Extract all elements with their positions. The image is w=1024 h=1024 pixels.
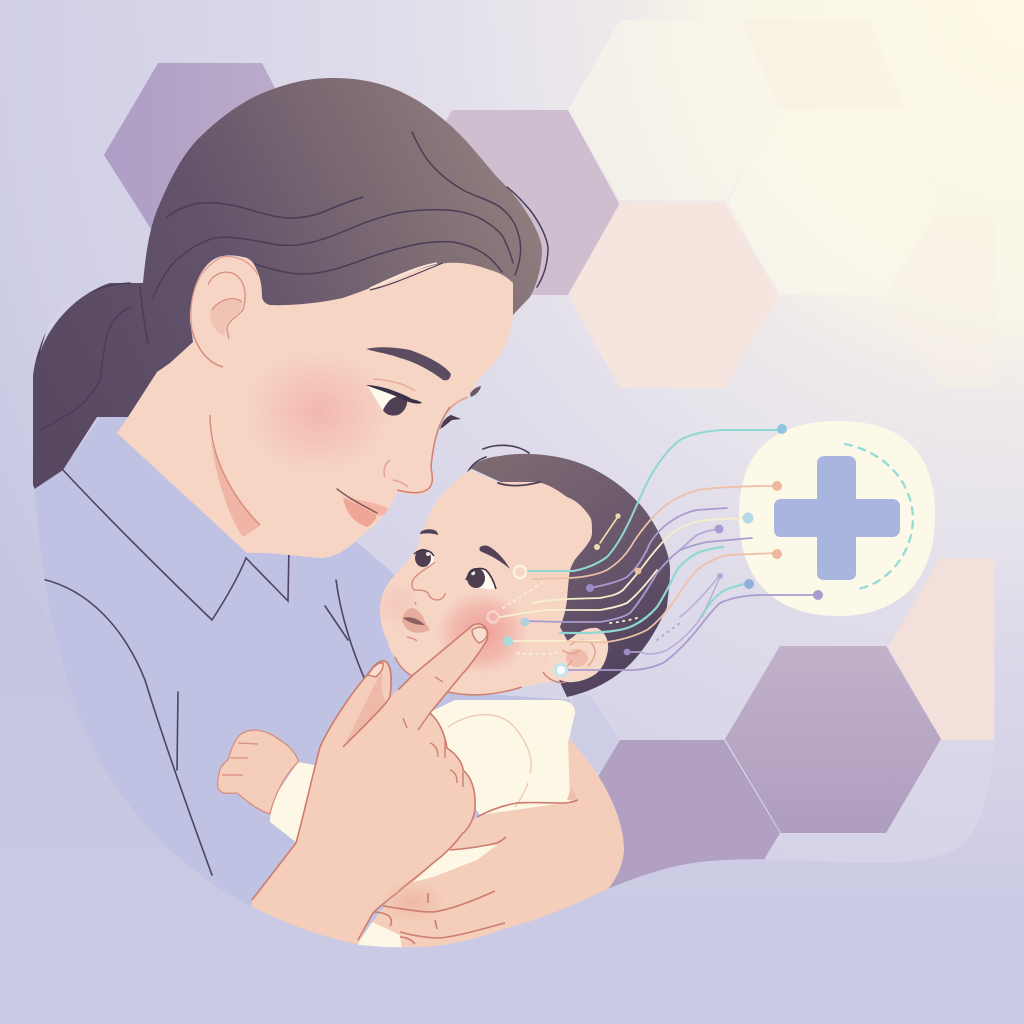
- hairline wisp: [370, 263, 437, 288]
- hexagon: peach centre: [568, 203, 778, 388]
- baby hand: [218, 730, 298, 814]
- hexagon: pale behind baby: [570, 695, 619, 772]
- line: teal lower: [702, 583, 748, 617]
- node: eye ring: [514, 566, 526, 578]
- mother hair strands: [38, 132, 548, 430]
- line: teal top: [527, 430, 782, 571]
- line: dotted highlights: [503, 583, 637, 654]
- line: lavender faint: [680, 575, 720, 617]
- mother lower arm: [370, 738, 624, 950]
- light strand by ponytail: [40, 285, 105, 352]
- line: lavender short: [680, 529, 719, 550]
- network nodes: [488, 424, 823, 677]
- mother nose: [384, 460, 408, 487]
- hexagon: purple top left: [104, 63, 310, 240]
- shirt collar and fold lines: [42, 470, 365, 875]
- hexagon: faint top right peach: [740, 20, 905, 108]
- mother ear: [190, 257, 269, 370]
- knuckle shading: [385, 888, 432, 916]
- line: cream lower: [513, 640, 600, 642]
- mother eye crease: [373, 379, 415, 391]
- line: cream one: [533, 518, 743, 603]
- baby mouth: [402, 602, 430, 641]
- mother far eye: [440, 386, 481, 429]
- health badge: [739, 421, 935, 616]
- line: peach upper: [532, 486, 777, 579]
- node: white glow: [554, 663, 568, 677]
- hexagon: peach right: [888, 558, 994, 740]
- baby hair: [470, 454, 670, 697]
- badge background: [739, 421, 935, 616]
- baby face light network: [500, 430, 818, 670]
- bottom wave band right: [360, 740, 1024, 1024]
- hexagon: cream top: [568, 20, 778, 200]
- mother neck and face: [117, 250, 513, 558]
- node: teal top: [777, 424, 787, 434]
- baby garment: [355, 700, 575, 948]
- baby jaw line: [395, 657, 522, 695]
- baby sleeve cuff: [270, 762, 314, 842]
- mother lower fingers: [373, 800, 578, 944]
- hexagon: mauve centre: [400, 110, 620, 295]
- baby eyebrows: [420, 529, 510, 569]
- dashed teal arc: [845, 444, 913, 589]
- node: blue cheek: [520, 618, 530, 626]
- baby hair wisps: [468, 445, 529, 472]
- baby ear: [543, 628, 608, 683]
- line: teal mid: [560, 547, 723, 633]
- mother eyebrow: [366, 347, 451, 380]
- baby cheek blush: [441, 596, 522, 670]
- mother hair: [33, 78, 542, 490]
- line: lavender mid: [523, 538, 752, 622]
- line: lavender upper: [590, 508, 727, 588]
- hexagon cluster: [104, 20, 995, 900]
- line: lavender low: [627, 577, 720, 654]
- node: cheek ring: [488, 612, 498, 622]
- hexagon: pale right: [728, 112, 940, 295]
- baby nose: [412, 562, 445, 600]
- hexagon: purple lower centre: [590, 740, 780, 900]
- line: peach lower: [567, 553, 777, 642]
- baby face: [380, 470, 592, 695]
- baby eyes: [414, 549, 496, 589]
- baby hair under line: [498, 482, 540, 486]
- garment fold: [567, 787, 578, 800]
- mother eye: [366, 385, 422, 416]
- mother and baby figure: [0, 78, 670, 950]
- line: cream two: [500, 570, 657, 617]
- mother shirt: [0, 417, 570, 950]
- neck shadow: [211, 440, 260, 537]
- bottom wave band left: [0, 600, 360, 1024]
- right edge fade: [995, 560, 1024, 740]
- line: hair spark: [600, 518, 617, 543]
- face profile line: [397, 407, 450, 493]
- line: lavender bottom: [567, 595, 818, 670]
- jaw crease: [210, 415, 260, 525]
- icon: medical cross: [774, 456, 900, 580]
- mother cheek blush: [264, 367, 372, 458]
- mother main hand with pointing finger: [250, 624, 488, 945]
- hexagon: purple lower right: [725, 646, 941, 833]
- mother lips: [337, 489, 388, 527]
- hexagon: faint lower right: [888, 215, 995, 388]
